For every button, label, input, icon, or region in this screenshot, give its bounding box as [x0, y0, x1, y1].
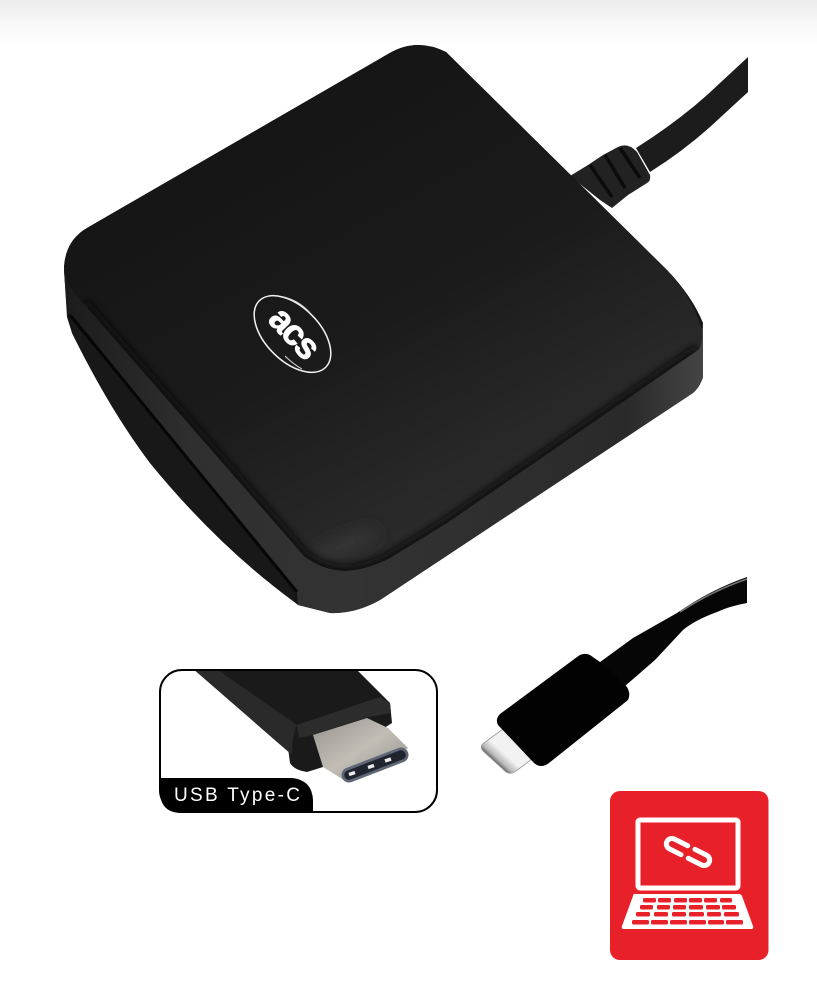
slot shadow line — [70, 315, 297, 592]
USB Type-C label: USB Type-C — [174, 785, 302, 806]
USB-C cable — [481, 577, 747, 773]
cable strain relief — [570, 145, 650, 208]
USB Type-C label — [160, 778, 313, 813]
reader top face — [64, 45, 702, 571]
housing collar — [297, 697, 391, 738]
USB Type-C close-up inset — [160, 668, 437, 813]
inset border — [160, 670, 437, 812]
chain link — [665, 837, 711, 867]
ACS logo — [240, 282, 345, 386]
housing side bevel — [192, 668, 297, 755]
silver plug — [481, 726, 540, 773]
reader body silhouette — [64, 45, 703, 613]
card reader device — [64, 45, 748, 613]
top grey fade band — [0, 0, 817, 48]
connector illustration — [192, 668, 408, 782]
laptop keyboard — [622, 894, 753, 929]
metal plug — [313, 718, 408, 782]
cable cord — [596, 577, 747, 686]
plug end face — [349, 755, 401, 775]
card slot lip — [70, 315, 297, 601]
laptop screen — [638, 820, 738, 888]
connector body — [497, 654, 629, 766]
red tile — [610, 791, 768, 960]
reader cable — [636, 57, 748, 172]
red laptop link icon — [610, 791, 768, 960]
connector housing — [192, 668, 392, 772]
face soft highlights and edge shadow — [84, 304, 698, 571]
side bevel — [64, 270, 703, 613]
cord highlight — [680, 579, 747, 612]
ACS logo: acs — [261, 298, 329, 367]
